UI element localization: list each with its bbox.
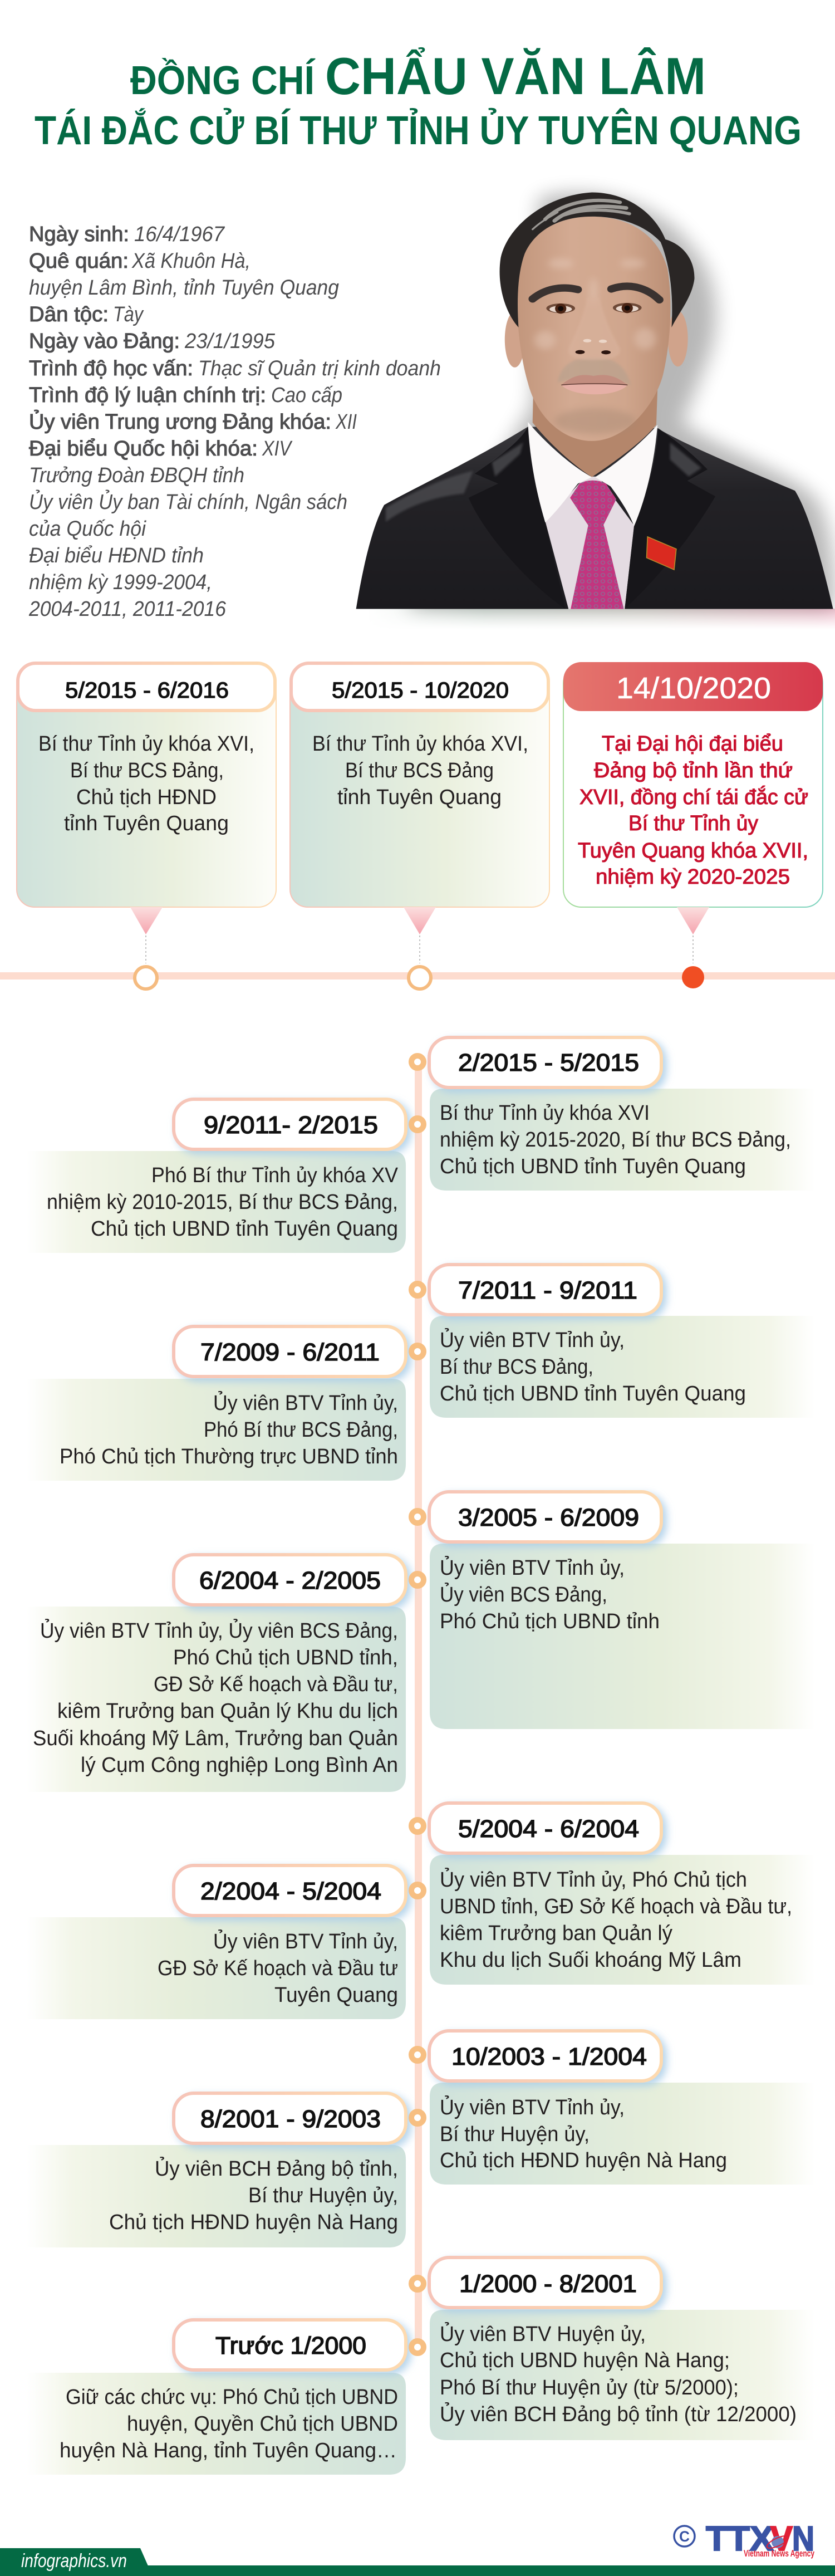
timeline card: 5/2015 - 10/2020 [290,663,549,907]
neck [533,389,657,477]
biography text block: 16/4/1967 [134,223,225,246]
hair grey streaks [533,200,630,229]
suit [356,427,833,609]
agency initials: N [792,2520,814,2558]
timeline entry: 6/2004 - 2/2005: kiêm Trưởng ban Quản lý Khu du lịch [57,1700,398,1723]
shirt [545,477,634,609]
timeline entry: 3/2005 - 6/2009: Ủy viên BTV Tỉnh ủy, [440,1555,625,1580]
biography text block: XIV [262,437,293,461]
timeline card: 5/2015 - 6/2016: Chủ tịch HĐND [76,786,217,809]
biography text block: của Quốc hội [29,517,146,541]
timeline entry: 2/2015 - 5/2015: Chủ tịch UBND tỉnh Tuyên Quang [440,1155,746,1178]
lips [561,375,627,394]
moustache stubble [558,357,631,385]
timeline entry: 10/2003 - 1/2004: Bí thư Huyện ủy, [440,2123,590,2146]
timeline entry: 2/2015 - 5/2015: Bí thư Tỉnh ủy khóa XVI [440,1101,650,1125]
timeline entry: 9/2011 - 2/2015: nhiệm kỳ 2010-2015, Bí thư BCS Đảng, [47,1191,398,1214]
timeline entry: 7/2009 - 6/2011: Phó Bí thư BCS Đảng, [204,1418,398,1442]
pointer and marker 2 [404,907,436,989]
timeline card: 5/2015 - 10/2020: Bí thư BCS Đảng [345,759,494,782]
timeline card: 14/10/2020: nhiệm kỳ 2020-2025 [596,865,790,889]
timeline entry: 6/2004 - 2/2005: lý Cụm Công nghiệp Long Bình An [81,1754,398,1777]
timeline entry: 2/2004 - 5/2004: Ủy viên BTV Tỉnh ủy, [213,1929,398,1953]
biography text block: Ngày vào Đảng: [29,330,180,353]
timeline entry: 10/2003 - 1/2004: 10/2003 - 1/2004 [451,2043,647,2070]
timeline entry: Trước 1/2000: huyện Nà Hang, tỉnh Tuyên Quang… [60,2439,397,2462]
portrait shadow [407,193,835,609]
timeline card: 14/10/2020: 14/10/2020 [616,672,771,705]
timeline card: 5/2015 - 10/2020: Bí thư Tỉnh ủy khóa XVI, [312,732,528,756]
timeline entry: 1/2000 - 8/2001: Chủ tịch UBND huyện Nà Hang; [440,2349,730,2372]
timeline card: 14/10/2020: Bí thư Tỉnh ủy [628,812,758,835]
timeline entry: 6/2004 - 2/2005: Ủy viên BTV Tỉnh ủy, Ủy viên BCS Đảng, [40,1618,398,1643]
logo: TTXVN [674,2520,814,2559]
timeline entry: 2/2004 - 5/2004: 2/2004 - 5/2004 [200,1878,381,1905]
biography text block: Trình độ học vấn: [29,357,193,380]
timeline entry: 2/2004 - 5/2004: GĐ Sở Kế hoạch và Đầu tư [158,1957,398,1980]
timeline entry: 7/2009 - 6/2011 [27,1326,424,1481]
timeline entry: 2/2015 - 5/2015: nhiệm kỳ 2015-2020, Bí thư BCS Đảng, [440,1128,791,1152]
timeline entry: 1/2000 - 8/2001: Ủy viên BTV Huyện ủy, [440,2322,646,2346]
timeline card: 5/2015 - 6/2016: Bí thư Tỉnh ủy khóa XVI, [38,732,254,756]
footer bar [0,2548,835,2576]
biography text block [28,223,441,621]
timeline entry: 7/2009 - 6/2011: Phó Chủ tịch Thường trực UBND tỉnh [60,1445,398,1468]
biography text block: Trưởng Đoàn ĐBQH tỉnh [29,464,244,487]
timeline entry: 9/2011 - 2/2015 [27,1099,424,1253]
timeline entry: 1/2000 - 8/2001 [411,2257,815,2440]
biography text block: Thạc sĩ Quản trị kinh doanh [198,357,441,380]
timeline entry: 2/2004 - 5/2004 [27,1865,424,2019]
timeline entry: 1/2000 - 8/2001: 1/2000 - 8/2001 [459,2270,637,2298]
biography text block: Ủy viên Ủy ban Tài chính, Ngân sách [29,489,347,514]
biography text block: 23/1/1995 [184,330,276,353]
timeline card: 14/10/2020: Tại Đại hội đại biểu [602,732,783,756]
timeline card: 14/10/2020 [563,662,823,907]
timeline entry: 3/2005 - 6/2009: 3/2005 - 6/2009 [458,1504,639,1531]
horizontal timeline bar [0,972,835,980]
title: CHẨU VĂN LÂM [325,46,706,105]
timeline entry: 10/2003 - 1/2004: Chủ tịch HĐND huyện Nà Hang [440,2149,727,2172]
biography text block: Tày [113,303,144,326]
copyright mark: C [679,2528,690,2545]
portrait illustration [356,193,835,609]
timeline entry: 6/2004 - 2/2005: GĐ Sở Kế hoạch và Đầu tư, [154,1673,398,1696]
timeline entry: 9/2011 - 2/2015: 9/2011- 2/2015 [204,1111,378,1139]
timeline entry: 9/2011 - 2/2015: Chủ tịch UBND tỉnh Tuyên Quang [91,1217,398,1241]
timeline entry: 2/2015 - 5/2015: 2/2015 - 5/2015 [458,1049,639,1076]
eyebrows [533,286,660,300]
pointer and marker 1 [130,907,163,989]
pointer and marker 3 [677,907,709,988]
timeline entry: 5/2004 - 6/2004: 5/2004 - 6/2004 [458,1815,639,1843]
timeline entry: Trước 1/2000: Giữ các chức vụ: Phó Chủ tịch UBND [66,2386,398,2409]
timeline entry: 3/2005 - 6/2009: Phó Chủ tịch UBND tỉnh [440,1610,660,1633]
timeline entry: 10/2003 - 1/2004 [411,2031,815,2185]
agency initials: V [770,2520,793,2558]
biography text block: Đại biểu HĐND tỉnh [29,544,204,567]
timeline entry: 8/2001 - 9/2003: Ủy viên BCH Đảng bộ tỉnh, [155,2156,398,2181]
timeline card: 14/10/2020: Đảng bộ tỉnh lần thứ [594,759,793,782]
timeline entry: 7/2011 - 9/2011: Chủ tịch UBND tỉnh Tuyên Quang [440,1382,746,1405]
ears [505,311,688,368]
eyes [546,303,642,314]
timeline entry: 7/2011 - 9/2011: 7/2011 - 9/2011 [458,1277,637,1304]
timeline entry: 3/2005 - 6/2009: Ủy viên BCS Đảng, [440,1582,607,1607]
timeline card: 5/2015 - 6/2016: Bí thư BCS Đảng, [70,759,224,782]
title [35,46,802,153]
timeline entry: Trước 1/2000: huyện, Quyền Chủ tịch UBND [127,2412,398,2436]
timeline entry: 1/2000 - 8/2001: Ủy viên BCH Đảng bộ tỉnh (từ 12/2000) [440,2402,797,2426]
biography text block: Quê quán: [29,249,129,273]
globe emblem [765,2534,790,2550]
biography text block: Đại biểu Quốc hội khóa: [29,437,258,461]
timeline card: 14/10/2020: XVII, đồng chí tái đắc cử [579,785,808,809]
timeline entry: 5/2004 - 6/2004: kiêm Trưởng ban Quản lý [440,1922,672,1945]
hair [500,193,694,327]
timeline entry: Trước 1/2000: Trước 1/2000 [215,2332,366,2359]
biography text block: Cao cấp [271,384,342,407]
timeline entry: 2/2004 - 5/2004: Tuyên Quang [274,1984,398,2007]
timeline entry: 1/2000 - 8/2001: Phó Bí thư Huyện ủy (từ 5/2000); [440,2376,739,2399]
biography text block: huyện Lâm Bình, tỉnh Tuyên Quang [29,276,339,300]
timeline entry: 7/2009 - 6/2011: 7/2009 - 6/2011 [200,1339,380,1366]
lapels [469,427,715,609]
biography text block: Ngày sinh: [29,223,129,246]
timeline entry: 7/2011 - 9/2011 [411,1265,815,1418]
biography text block: XII [335,410,357,434]
lapel pin [647,537,676,570]
nose [568,297,620,360]
agency initials: TTX [706,2520,774,2558]
copyright mark [674,2526,695,2546]
title: ĐỒNG CHÍ [130,58,316,103]
timeline entry: 5/2004 - 6/2004 [411,1803,815,1985]
biography text block: nhiệm kỳ 1999-2004, [29,571,212,594]
timeline card: 5/2015 - 6/2016 [17,663,276,907]
chin shade [554,408,636,434]
timeline entry: 5/2004 - 6/2004: UBND tỉnh, GĐ Sở Kế hoạch và Đầu tư, [440,1895,792,1918]
timeline entry: 7/2011 - 9/2011: Ủy viên BTV Tỉnh ủy, [440,1328,625,1352]
portrait strip [367,609,835,630]
timeline entry: 6/2004 - 2/2005: Suối khoáng Mỹ Lâm, Trưởng ban Quản [33,1727,398,1750]
timeline entry: 10/2003 - 1/2004: Ủy viên BTV Tỉnh ủy, [440,2095,625,2119]
collar [528,422,657,526]
timeline card: 5/2015 - 10/2020: 5/2015 - 10/2020 [332,678,509,703]
timeline card: 5/2015 - 6/2016: 5/2015 - 6/2016 [65,678,229,703]
biography text block: Xã Khuôn Hà, [131,249,250,273]
skin highlights [534,258,656,350]
timeline entry: 8/2001 - 9/2003: Bí thư Huyện ủy, [248,2184,398,2207]
timeline entry: 6/2004 - 2/2005 [27,1555,424,1792]
timeline entry: 6/2004 - 2/2005: 6/2004 - 2/2005 [199,1567,381,1594]
footer bar: infographics.vn [21,2550,127,2572]
timeline entry: 5/2004 - 6/2004: Khu du lịch Suối khoáng Mỹ Lâm [440,1948,741,1972]
timeline entry: 6/2004 - 2/2005: Phó Chủ tịch UBND tỉnh, [173,1646,398,1669]
timeline card: 5/2015 - 6/2016: tỉnh Tuyên Quang [64,812,229,835]
timeline entry: 7/2011 - 9/2011: Bí thư BCS Đảng, [440,1355,593,1379]
timeline entry: 3/2005 - 6/2009 [411,1492,815,1729]
timeline entry: 9/2011 - 2/2015: Phó Bí thư Tỉnh ủy khóa XV [151,1164,399,1187]
timeline entry: 8/2001 - 9/2003: 8/2001 - 9/2003 [200,2105,381,2133]
agency initials [706,2520,814,2558]
timeline entry: Trước 1/2000 [27,2320,424,2475]
lapel sheen [386,442,701,522]
timeline entry: 7/2009 - 6/2011: Ủy viên BTV Tỉnh ủy, [213,1390,398,1415]
biography text block: Trình độ lý luận chính trị: [29,384,266,407]
timeline entry: 8/2001 - 9/2003 [27,2093,424,2247]
timeline card: 5/2015 - 10/2020: tỉnh Tuyên Quang [337,786,502,809]
tie [570,481,624,609]
vertical timeline line [415,1062,422,2348]
biography text block: Ủy viên Trung ương Đảng khóa: [29,409,331,434]
timeline card: 14/10/2020: Tuyên Quang khóa XVII, [578,839,808,863]
biography text block: 2004-2011, 2011-2016 [28,598,227,621]
timeline entry: 8/2001 - 9/2003: Chủ tịch HĐND huyện Nà Hang [109,2211,398,2234]
timeline entry: 5/2004 - 6/2004: Ủy viên BTV Tỉnh ủy, Phó Chủ tịch [440,1867,747,1892]
timeline entry: 2/2015 - 5/2015 [411,1037,815,1191]
face [517,217,670,441]
biography text block: Dân tộc: [29,303,109,326]
